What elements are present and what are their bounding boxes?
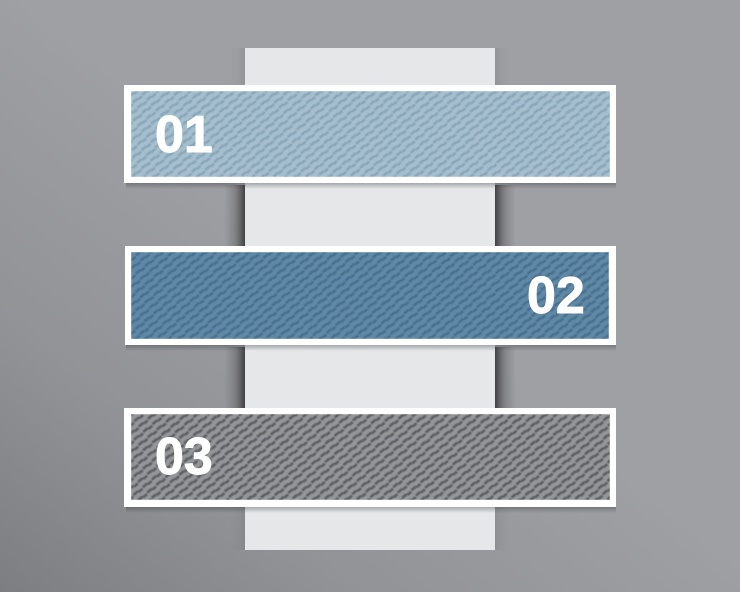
number 01: 01: [155, 106, 213, 164]
paper strip shadows: [224, 48, 516, 550]
number 02: 02: [527, 267, 585, 325]
paper strip: [245, 48, 495, 550]
number 03: 03: [155, 428, 213, 486]
banner 01: [124, 85, 616, 189]
banner 02: [125, 246, 616, 351]
banner 03: [124, 408, 616, 513]
